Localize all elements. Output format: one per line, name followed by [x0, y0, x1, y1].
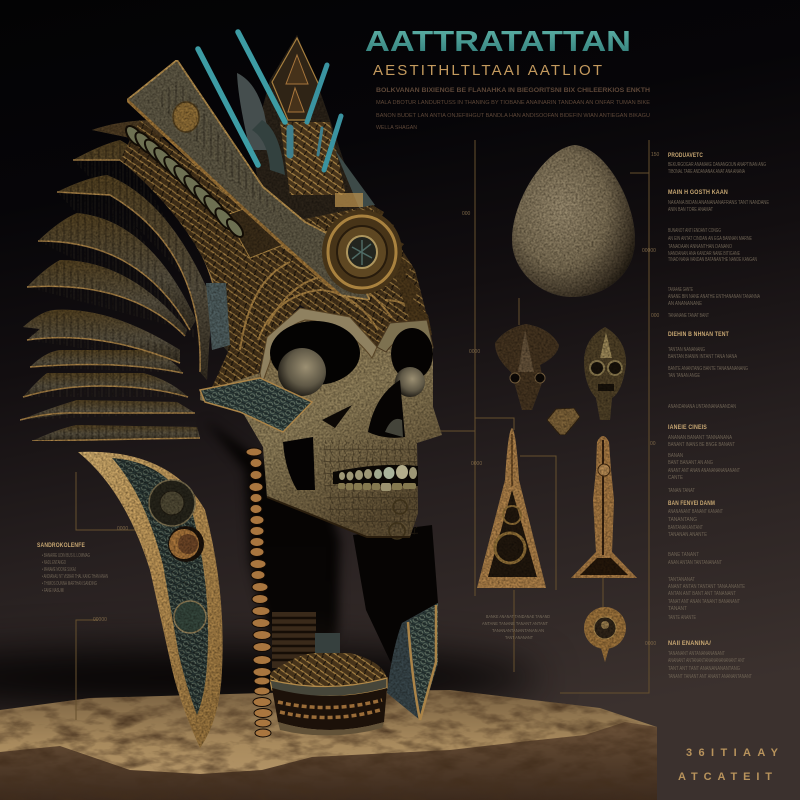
right column text: BANAN: [668, 453, 683, 459]
left text block: 0000: [117, 526, 128, 532]
right column text: ANANANANT BANANT KANANT: [668, 509, 723, 515]
right column text: ANIN BAN TORE ANAMAT: [668, 207, 713, 213]
left text block: • ANDIANAU NT VISBAR THAL KANG THAM ANAN: [42, 574, 108, 580]
right column text: TANANANE TANAT BANT: [668, 313, 709, 319]
spiked edge: [372, 205, 432, 335]
right column text: BANTE ANANTANG BANTE TANANANANANG: [668, 366, 748, 372]
right column text: BANTAN BIANIN INTANT TANA NANA: [668, 354, 738, 360]
wedge panel: [127, 60, 370, 300]
fin rib overlay: [20, 140, 225, 441]
left text block: • BANAIRE UDIN BUS IL LOMMAG: [42, 553, 90, 559]
right column text: MAIN H GOSTH KAAN: [668, 190, 728, 196]
right column text: TANTANANAT: [668, 577, 695, 583]
lower teeth: [338, 483, 416, 491]
right column text: ANANDANANA UNTANNANANANDAN: [668, 404, 736, 410]
rock plinth: [0, 690, 657, 800]
right column text: 000: [651, 313, 660, 319]
upper teeth: [339, 465, 417, 480]
crack texture: [318, 440, 418, 535]
teal rods: [198, 32, 341, 170]
right eyeball: [395, 367, 425, 397]
coil band: [123, 123, 246, 240]
right column text: PRODUAVETC: [668, 153, 703, 159]
blade rosette lower: [174, 601, 206, 633]
left text block: • THIMOS DUNNA MARTHAN SANDING: [42, 581, 97, 587]
left eye socket: [270, 321, 360, 385]
medallion: [322, 210, 402, 294]
brow rim: [260, 308, 377, 384]
right column text: BANT BANANT AN ANG: [668, 460, 713, 466]
right column text: NAKANA BIDAN ANANANANAFRANS TANT NANDANE: [668, 200, 770, 206]
left text block: • MANAME MOONE SUKAJ: [42, 567, 76, 573]
small pendant: [547, 408, 580, 435]
intro paragraph: MALA DBOTUR LANDURTUSS IN THANING BY TIOBANE ANAINARIN TANDAAN AN ONFAR TUMAN BIKE: [376, 100, 650, 106]
right eye socket: [391, 328, 433, 380]
headdress fins: [20, 120, 234, 441]
crown ornaments: [198, 32, 375, 232]
right column text: TAN TANAN ANGE: [668, 373, 700, 379]
cheek band: [200, 378, 312, 432]
right column text: TANAN TANAT: [668, 488, 695, 494]
bottom right label: 36ITIAAY: [686, 747, 779, 759]
skull: [200, 308, 442, 539]
right column text: CANTE: [668, 475, 684, 481]
right column text: TANTE ANANTE: [668, 615, 696, 621]
right column text: TANTAN NANANANG: [668, 347, 705, 353]
crown base: [237, 35, 375, 232]
intro paragraph: [376, 87, 650, 131]
right column text: BAN FENVEI DANM: [668, 501, 715, 507]
right column text: AN EIN ANTAT CINDAN AN EGA BANNAN MARNE: [668, 236, 752, 242]
right column text: ANANT ANTAN TANTANT TANA ANANTE: [668, 584, 746, 590]
right column text: TINAD NANA VANDAN BATANANTHE NANDE KANGAN: [668, 257, 757, 263]
left text block: [37, 526, 128, 623]
right column text: TIBONAL TARE ANDANANAK ANAT ANA ANANA: [668, 169, 745, 175]
intro paragraph: BOLKVANAN BIXIENGE BE FLANAHKA IN BIEGORITSNI BIX CHILEERKIOS ENKTH: [376, 87, 650, 94]
fin gold edges: [20, 160, 222, 441]
title: AATTRATATTAN: [365, 26, 631, 58]
right column text: TANANTANG: [668, 517, 697, 523]
right column text: BANANT INANS BE BNGE BANANT: [668, 442, 735, 448]
right column text: DIEHIN B NHNAN TENT: [668, 332, 729, 338]
tall artefact: [571, 436, 637, 578]
wedge gold scroll: [173, 102, 199, 132]
right column text: 00: [650, 441, 656, 447]
axis labels: 0000: [471, 461, 482, 467]
axis labels: 000: [462, 211, 471, 217]
right column text: NAII ENANINA/: [668, 641, 711, 647]
bottom right label: [678, 747, 779, 783]
right column text: TANAANE GANTE: [668, 287, 693, 293]
bottom right label: ATCATEIT: [678, 771, 772, 783]
jaw hole: [283, 437, 315, 490]
right column text: BUNANOT ANTI ENDANT CONGG: [668, 228, 721, 234]
right column text: TANANANT ANTANANANANANT: [668, 651, 725, 657]
right column text: ANANE BIN NANE ANATHE ENTHANANAN TANANNA: [668, 294, 760, 300]
right column text: ANANT ANT ANAN ANANANANANANANT: [668, 468, 740, 474]
right column text: ANTAN ANT BANT ANT TANANANT: [668, 591, 736, 597]
right column text: [642, 152, 770, 680]
right column text: 00000: [642, 248, 656, 254]
slate inlay: [206, 283, 230, 350]
left text block: • FANE NASUMI: [42, 588, 64, 594]
neck column: [205, 420, 340, 668]
blade rosette upper: [149, 480, 195, 526]
egg stone: [512, 145, 635, 297]
mouth: [333, 465, 418, 486]
subtitle: AESTITHLTLTAAI AATLIOT: [373, 62, 602, 79]
right column text: TANANT TANANT ANT ANANT ANANANTANANT: [668, 674, 752, 680]
right blade: [353, 525, 438, 720]
mask B: [584, 327, 626, 420]
right column text: ANANANT ANTANANTANANANANANANT ANT: [668, 658, 745, 664]
intro paragraph: WELLA SHAGAN: [376, 125, 417, 131]
right column text: ANAN ANTAN TANTANANANT: [668, 560, 722, 566]
mask A: [495, 324, 559, 410]
right column text: AN ANANANANE: [668, 301, 703, 307]
right column text: 0000: [645, 641, 656, 647]
right column text: TANT ANT TANT ANANANANANTANG: [668, 666, 740, 672]
intro paragraph: BANON BUDET LAN ANTIA ONJEFIIHGUT BANDLA HAN ANDISOOFAN BIDEFIN WIAN ANTIEGAN BIKAGU: [376, 113, 650, 119]
jaw scrollwork: [389, 500, 407, 539]
axis labels: [462, 211, 482, 467]
right column text: IANEIE CINEIS: [668, 425, 707, 431]
right column text: ANANAN BANANT TANNANANA: [668, 435, 733, 441]
left eyeball: [278, 348, 326, 396]
axis labels: 0000: [469, 349, 480, 355]
right column text: NANDANAN ANA KANDAR NANE BITIGANE: [668, 251, 740, 257]
ground shadow: [0, 648, 540, 708]
left curved blade: [78, 452, 223, 748]
skull bone: [200, 308, 442, 537]
caption below triangle: TANT ANANANT: [505, 635, 533, 641]
right column text: BANTANAN ANTANT: [668, 525, 703, 531]
cheek gap: [322, 405, 352, 428]
forehead arcs: [240, 262, 425, 350]
caption below triangle: [482, 614, 550, 641]
blade knob: [168, 526, 204, 562]
connector lines: [76, 140, 649, 720]
right column text: TANANAN ANANTE: [668, 532, 708, 538]
right column text: TANANT: [668, 606, 687, 612]
right column text: TANADAAN ANNANTHAN DANANO: [668, 244, 732, 250]
bead string: [246, 448, 272, 737]
caption below triangle: ANTANE TANANE TANANT ANTANT: [482, 621, 548, 627]
disc artefact: [584, 607, 626, 662]
caption below triangle: BANKE ANANAT TANDANAE TANAND: [486, 614, 550, 620]
right column text: TANAT ANT ANAN TANANT BANANANT: [668, 599, 740, 605]
nose cavity: [368, 380, 405, 438]
left text block: SANDROKOLENFE: [37, 543, 85, 549]
caption below triangle: TANANANTANANTANAN AN: [492, 628, 544, 634]
right column text: 150: [651, 152, 660, 158]
triangle artefact: [477, 428, 546, 588]
right column text: BANE TANANT: [668, 552, 699, 558]
left text block: 00000: [93, 617, 107, 623]
base bowl: [270, 633, 387, 736]
crest plaque: [335, 193, 363, 207]
left text block: • NADL ENTANGO: [42, 560, 66, 566]
headdress dome: [120, 120, 432, 392]
